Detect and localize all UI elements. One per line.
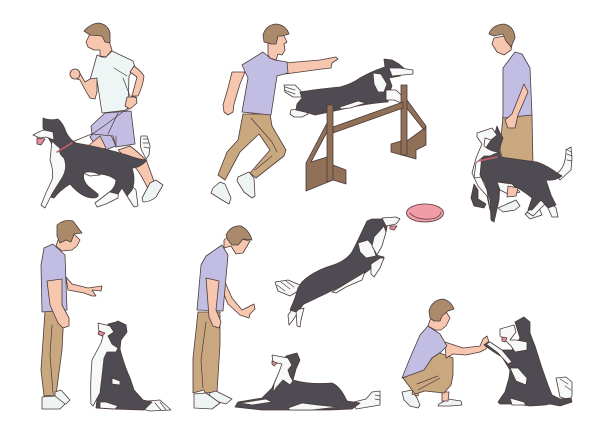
- dog jumping for frisbee: [275, 217, 400, 327]
- man giving down signal: [193, 226, 255, 409]
- man jogging: [70, 23, 163, 202]
- frisbee: [406, 204, 444, 222]
- scene: jogging with dog on leash: [33, 23, 163, 208]
- hurdle: [306, 85, 426, 191]
- leash: [72, 108, 128, 142]
- scene: man standing beside dog: [471, 24, 572, 222]
- dog walking: [33, 118, 150, 208]
- scene: dog jumping over hurdle: [211, 24, 426, 204]
- scene: lie down command: [193, 226, 380, 410]
- scene: sit command: [41, 220, 171, 411]
- dog leaping: [284, 59, 413, 117]
- dog lying down: [235, 353, 380, 410]
- man crouching: [402, 299, 489, 408]
- man giving sit signal: [41, 220, 102, 409]
- dog sitting with raised paw: [484, 317, 572, 406]
- dog looking up at man: [471, 126, 572, 222]
- scene: high five: [402, 299, 572, 408]
- man looking at dog: [489, 24, 542, 219]
- artwork group: [33, 23, 572, 411]
- man pointing: [211, 24, 338, 204]
- scene: frisbee catch: [275, 204, 444, 327]
- dog sitting: [91, 321, 171, 411]
